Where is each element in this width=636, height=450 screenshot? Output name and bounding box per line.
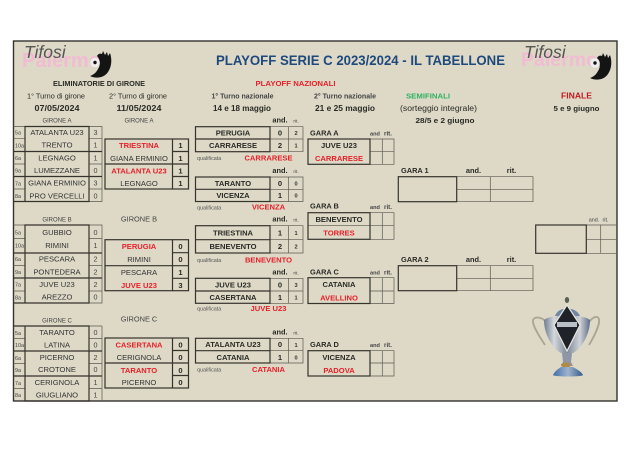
match: Juve U23 - Casertana: 0 xyxy=(278,280,282,289)
headings: eliminatorie di girone: GIRONE A xyxy=(42,118,72,124)
panel: first round group C: GIUGLIANO xyxy=(36,390,78,399)
match: gara A: CARRARESE xyxy=(315,154,363,163)
panel: first round group B: PONTEDERA xyxy=(33,267,82,276)
panel: first round group B: 1 xyxy=(94,241,98,250)
logo: Tifosi Palermo left xyxy=(22,42,111,78)
match: Juve U23 - Casertana: and. xyxy=(272,268,288,276)
headings: playoff nazionali: 1° Turno nazionale xyxy=(212,92,274,100)
panel: first round group C xyxy=(14,326,102,401)
panel: first round group B: 0 xyxy=(94,228,98,237)
headings: semifinali: 28/5 e 2 giugno xyxy=(416,116,475,125)
panel: second round group A: 1 xyxy=(178,166,183,176)
match: Triestina - Benevento: 2 xyxy=(278,242,282,251)
logo: Tifosi Palermo left: Palermo xyxy=(22,50,101,72)
match: Atalanta U23 - Catania xyxy=(196,328,303,374)
match: Triestina - Benevento: 2 xyxy=(294,244,298,250)
match: Taranto - Vicenza: rit. xyxy=(293,169,299,175)
panel: second round group B: JUVE U23 xyxy=(121,281,157,290)
match: Triestina - Benevento: and. xyxy=(272,214,288,224)
match: gara B: GARA B xyxy=(310,202,339,211)
panel: second round group A: LEGNAGO xyxy=(120,179,158,188)
match: gara 1: GARA 1 xyxy=(401,166,429,175)
match: Taranto - Vicenza: 0 xyxy=(294,194,298,200)
match: Triestina - Benevento: 1 xyxy=(278,228,283,238)
title: PLAYOFF SERIE C 2023/2024 - IL TABELLONE xyxy=(216,52,505,68)
panel: second round group C: CASERTANA xyxy=(115,340,163,349)
match: gara D: VICENZA xyxy=(322,353,356,362)
match: gara A: JUVE U23 xyxy=(321,141,357,150)
match: Atalanta U23 - Catania: qualificata xyxy=(197,368,221,374)
match: Juve U23 - Casertana: 1 xyxy=(278,293,283,302)
panel: second round group A: ATALANTA U23 xyxy=(111,166,167,176)
panel: first round group A: 8a xyxy=(15,194,21,200)
headings: finale: FINALE xyxy=(561,92,593,100)
match: Taranto - Vicenza: 0 xyxy=(294,181,298,187)
match: Atalanta U23 - Catania: ATALANTA U23 xyxy=(205,340,261,349)
panel: first round group C: 2 xyxy=(94,353,98,362)
panel: second round group A: 1 xyxy=(178,154,183,163)
match: Juve U23 - Casertana: JUVE U23 xyxy=(215,280,251,289)
panel: first round group A: 6a xyxy=(15,156,21,162)
logo: Tifosi Palermo right xyxy=(521,42,611,80)
match: gara C: CATANIA xyxy=(322,280,356,289)
panel: first round group B: 9a xyxy=(15,270,21,276)
panel: first round group C: PICERNO xyxy=(40,353,74,362)
panel: second round group A xyxy=(105,139,188,189)
panel: first round group A: GIANA ERMINIO xyxy=(28,179,86,188)
panel: first round group A xyxy=(14,126,102,202)
panel: first round group C: CROTONE xyxy=(38,365,76,374)
panel: first round group B: 0 xyxy=(94,293,98,302)
panel: second round group B: 0 xyxy=(178,242,183,251)
panel: first round group A: 0 xyxy=(94,192,98,200)
match: Juve U23 - Casertana: CASERTANA xyxy=(209,293,257,302)
panel: first round group C: 0 xyxy=(94,365,98,374)
match: Juve U23 - Casertana: 1 xyxy=(294,296,298,302)
panel: second round group B: 3 xyxy=(178,281,183,290)
panel: first round group C: TARANTO xyxy=(39,328,75,337)
logo: Tifosi Palermo right: Tifosi xyxy=(524,42,567,62)
panel: second round group B xyxy=(105,240,188,291)
panel: second round group C: 0 xyxy=(178,366,183,375)
panel: second round group B: 1 xyxy=(178,268,183,277)
match: Perugia - Carrarese: CARRARESE xyxy=(209,141,257,150)
match: Juve U23 - Casertana: 3 xyxy=(294,283,298,289)
heading: girone C: GIRONE C xyxy=(121,314,158,324)
panel: first round group C: 6a xyxy=(15,356,21,362)
panel: second round group C: 0 xyxy=(178,353,183,362)
match: gara 1 xyxy=(398,166,533,202)
panel: first round group B: PESCARA xyxy=(39,255,76,264)
match: Atalanta U23 - Catania: 0 xyxy=(294,355,298,361)
match: Taranto - Vicenza xyxy=(196,166,303,212)
match: gara 2: rit. xyxy=(507,255,516,264)
panel: second round group B: PERUGIA xyxy=(122,242,157,251)
panel: first round group A: 1 xyxy=(94,141,98,150)
match: Triestina - Benevento: BENEVENTO xyxy=(245,255,292,264)
match: Perugia - Carrarese: 2 xyxy=(294,131,298,137)
panel: second round group B: RIMINI xyxy=(127,255,151,264)
panel: second round group C: PICERNO xyxy=(122,378,156,387)
match: Perugia - Carrarese: 2 xyxy=(278,141,282,150)
match: gara 1: rit. xyxy=(507,166,516,175)
heading: girone C: GIRONE C xyxy=(42,318,72,324)
match: gara C: GARA C xyxy=(310,268,340,276)
panel: first round group B: 5a xyxy=(15,230,21,236)
match: Perugia - Carrarese xyxy=(196,116,303,163)
headings: playoff nazionali: 21 e 25 maggio xyxy=(315,104,375,113)
match: Triestina - Benevento: rit. xyxy=(293,218,299,224)
match: gara 2: and. xyxy=(466,255,481,264)
match: Atalanta U23 - Catania: CATANIA xyxy=(252,365,286,374)
panel: first round group A: 7a xyxy=(15,182,21,188)
match: gara A xyxy=(308,129,394,164)
headings: finale xyxy=(554,92,600,113)
match: Triestina - Benevento: TRIESTINA xyxy=(213,228,254,238)
headings: eliminatorie di girone: 11/05/2024 xyxy=(116,104,162,113)
match: Juve U23 - Casertana: JUVE U23 xyxy=(251,304,286,313)
match: Perugia - Carrarese: rit. xyxy=(293,118,299,124)
panel: second round group C: TARANTO xyxy=(121,366,157,375)
match: gara B: BENEVENTO xyxy=(315,215,363,224)
panel: first round group A: ATALANTA U23 xyxy=(30,128,84,137)
match: Atalanta U23 - Catania: and. xyxy=(272,328,288,336)
match: finale: and. xyxy=(589,218,599,224)
panel: first round group B: RIMINI xyxy=(45,241,69,250)
headings: finale: 5 e 9 giugno xyxy=(554,104,600,113)
match: Juve U23 - Casertana xyxy=(196,268,303,313)
icon: trophy xyxy=(533,297,599,376)
panel: first round group B: GUBBIO xyxy=(42,228,72,237)
headings: eliminatorie di girone: 2° Turno di girone xyxy=(109,92,167,100)
heading: girone B: GIRONE B xyxy=(42,218,72,224)
panel: first round group C: 1 xyxy=(94,390,98,399)
match: gara A: and xyxy=(370,132,381,138)
match: gara D: PADOVA xyxy=(323,366,355,375)
match: gara A: rit. xyxy=(384,130,392,138)
panel: first round group A: 0 xyxy=(94,166,98,175)
panel: first round group B: AREZZO xyxy=(42,293,72,302)
match: Juve U23 - Casertana: qualificata xyxy=(197,306,221,312)
panel: first round group B: 2 xyxy=(94,280,98,289)
panel: first round group A: 9a xyxy=(15,169,21,175)
heading: girone C xyxy=(42,314,158,324)
panel: first round group B: 2 xyxy=(94,267,98,276)
panel: second round group B: 0 xyxy=(178,255,183,264)
match: Perugia - Carrarese: PERUGIA xyxy=(216,129,251,138)
panel: second round group C xyxy=(105,338,188,388)
match: Atalanta U23 - Catania: rit. xyxy=(293,330,299,336)
panel: first round group B: 6a xyxy=(15,257,21,263)
panel: second round group B: PESCARA xyxy=(121,268,158,277)
headings: semifinali: (sorteggio integrale) xyxy=(400,104,477,113)
panel: second round group A: GIANA ERMINIO xyxy=(110,154,168,163)
match: Atalanta U23 - Catania: CATANIA xyxy=(216,353,250,362)
panel: first round group C: 10a xyxy=(15,343,24,349)
match: gara 1: and. xyxy=(466,166,481,175)
panel: first round group A: LEGNAGO xyxy=(38,154,76,162)
headings: semifinali: SEMIFINALI xyxy=(406,92,450,100)
panel: bracket board xyxy=(14,41,617,401)
panel: first round group C: 5a xyxy=(15,331,21,337)
match: Triestina - Benevento xyxy=(196,214,303,264)
panel: first round group A: PRO VERCELLI xyxy=(29,192,85,200)
match: gara C: and xyxy=(370,271,381,277)
panel: first round group C: 9a xyxy=(15,368,21,374)
match: gara B xyxy=(308,202,394,239)
panel: second round group A: 1 xyxy=(178,179,183,188)
panel: first round group C: 7a xyxy=(15,381,21,387)
panel: first round group A: 1 xyxy=(94,154,98,162)
logo: Tifosi Palermo left: Tifosi xyxy=(24,42,67,62)
match: Taranto - Vicenza: 0 xyxy=(278,179,282,188)
panel: first round group C: 8a xyxy=(15,393,21,399)
match: gara B: and xyxy=(370,205,381,211)
panel: first round group B: 2 xyxy=(94,255,98,264)
panel: first round group A: 5a xyxy=(15,130,21,136)
match: gara D: rit. xyxy=(384,342,392,349)
panel: first round group B xyxy=(14,225,102,303)
match: finale xyxy=(536,218,617,253)
match: Perugia - Carrarese: and. xyxy=(272,116,288,124)
panel: second round group A: TRIESTINA xyxy=(119,141,160,150)
panel: first round group C: 0 xyxy=(94,340,98,349)
panel: first round group A: TRENTO xyxy=(41,141,73,150)
panel: first round group A: 3 xyxy=(94,128,98,137)
panel: second round group C: 0 xyxy=(178,378,183,387)
match: gara D xyxy=(308,340,394,376)
match: gara B: rit. xyxy=(384,204,392,211)
match: Atalanta U23 - Catania: 0 xyxy=(278,340,282,349)
match: Juve U23 - Casertana: rit. xyxy=(293,270,299,276)
panel: first round group C: 1 xyxy=(94,378,98,387)
match: Triestina - Benevento: 1 xyxy=(294,231,298,237)
heading: girone B xyxy=(42,214,157,224)
headings: eliminatorie di girone xyxy=(27,79,167,124)
match: gara 2 xyxy=(398,255,533,291)
panel: second round group C: 0 xyxy=(178,340,183,349)
match: Taranto - Vicenza: qualificata xyxy=(197,206,221,212)
match: Triestina - Benevento: BENEVENTO xyxy=(209,242,257,251)
match: Taranto - Vicenza: 1 xyxy=(278,191,283,200)
headings: eliminatorie di girone: ELIMINATORIE DI GIRONE xyxy=(53,79,145,88)
headings: eliminatorie di girone: 1° Turno di girone xyxy=(27,92,85,100)
match: gara C: rit. xyxy=(384,270,392,277)
headings: playoff nazionali: 14 e 18 maggio xyxy=(213,104,271,113)
match: Perugia - Carrarese: CARRARESE xyxy=(244,154,293,163)
match: Taranto - Vicenza: VICENZA xyxy=(252,203,286,212)
panel: first round group C: CERIGNOLA xyxy=(35,378,80,387)
headings: semifinali xyxy=(400,92,477,125)
match: gara A: GARA A xyxy=(310,129,339,138)
match: gara C: AVELLINO xyxy=(320,293,358,302)
match: Taranto - Vicenza: and. xyxy=(272,166,288,175)
panel: first round group A: LUMEZZANE xyxy=(34,166,80,175)
match: Triestina - Benevento: qualificata xyxy=(197,258,221,264)
match: Taranto - Vicenza: TARANTO xyxy=(215,179,251,188)
match: Perugia - Carrarese: 1 xyxy=(294,144,298,150)
panel: first round group A: 3 xyxy=(94,179,98,188)
match: gara D: and xyxy=(370,343,381,349)
panel: first round group B: 10a xyxy=(15,244,24,250)
headings: playoff nazionali xyxy=(212,79,376,113)
panel: second round group C: CERIGNOLA xyxy=(117,353,162,362)
match: gara B: TORRES xyxy=(323,228,355,238)
match: Taranto - Vicenza: VICENZA xyxy=(216,191,250,200)
heading: girone B: GIRONE B xyxy=(121,214,157,224)
match: gara C xyxy=(308,268,394,304)
logo: Tifosi Palermo right: Palermo xyxy=(521,49,598,71)
panel: second round group A: 1 xyxy=(178,141,183,150)
panel: first round group C: 0 xyxy=(94,328,98,337)
headings: eliminatorie di girone: GIRONE A xyxy=(124,118,154,124)
match: Atalanta U23 - Catania: 1 xyxy=(294,343,298,349)
headings: eliminatorie di girone: 07/05/2024 xyxy=(34,104,80,113)
headings: playoff nazionali: PLAYOFF NAZIONALI xyxy=(256,79,336,88)
match: finale: rit. xyxy=(602,218,608,224)
match: Perugia - Carrarese: 0 xyxy=(278,129,282,138)
match: Atalanta U23 - Catania: 1 xyxy=(278,353,283,362)
match: Perugia - Carrarese: qualificata xyxy=(197,156,221,162)
panel: first round group C: LATINA xyxy=(44,340,71,349)
panel: first round group B: 8a xyxy=(15,296,21,302)
match: gara 2: GARA 2 xyxy=(401,255,429,264)
match: gara D: GARA D xyxy=(310,340,340,349)
panel: first round group B: 7a xyxy=(15,282,21,288)
headings: playoff nazionali: 2° Turno nazionale xyxy=(314,92,376,100)
panel: first round group B: JUVE U23 xyxy=(39,280,75,289)
panel: first round group A: 10a xyxy=(15,144,24,150)
